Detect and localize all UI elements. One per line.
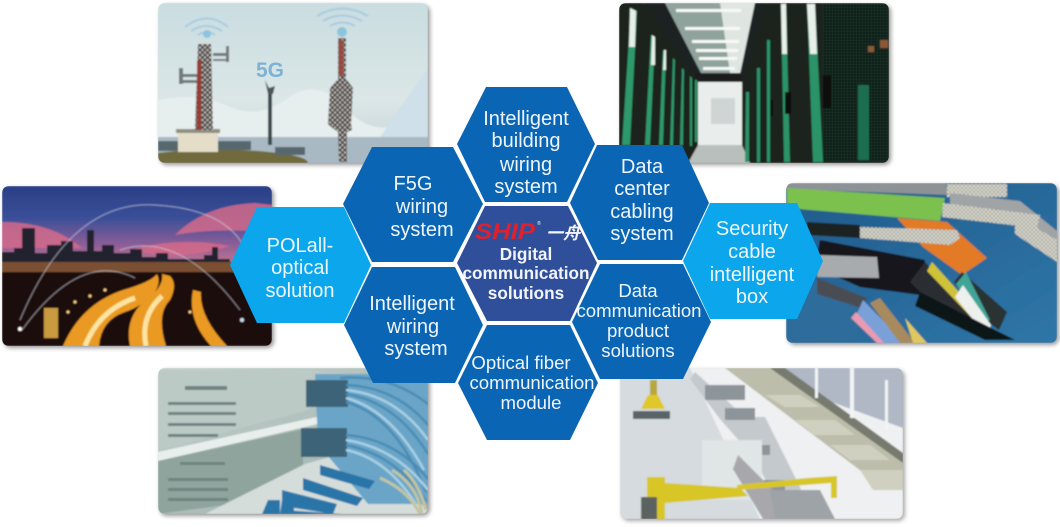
hexagon: data communication product solutions: communication xyxy=(576,300,702,321)
hexagon: security cable intelligent box: box xyxy=(736,286,768,308)
hexagon: optical fiber communication module: module xyxy=(501,392,561,413)
hexagon: data center cabling system: center xyxy=(614,178,670,200)
label: 5G: 5G xyxy=(256,59,284,82)
hexagon: POL all-optical solution: optical xyxy=(271,257,329,279)
hexagon: data communication product solutions xyxy=(572,264,711,379)
hexagon: optical fiber communication module: Optical fiber xyxy=(471,352,571,373)
hexagon: data center cabling system: system xyxy=(610,223,674,245)
hexagon: data communication product solutions: product xyxy=(607,320,670,341)
hexagon: optical fiber communication module xyxy=(458,325,598,440)
hexagon: central digital communication solutions: Digital xyxy=(500,244,552,264)
hexagon: central digital communication solutions: ® xyxy=(537,220,541,227)
photo: city skyline at night xyxy=(2,186,274,348)
photo: data center aisle xyxy=(619,3,891,165)
hexagon: intelligent wiring system: wiring xyxy=(386,316,439,338)
hexagon: security cable intelligent box: Security xyxy=(716,218,788,240)
hexagon: security cable intelligent box: intelligent xyxy=(710,264,795,286)
hexagon: intelligent building wiring system: building xyxy=(492,130,560,152)
hexagon: data center cabling system: Data xyxy=(621,156,664,178)
hexagon: POL all-optical solution: POLall- xyxy=(267,235,333,257)
hexagon: POL all-optical solution: solution xyxy=(266,280,334,302)
hexagon: intelligent wiring system xyxy=(344,267,483,383)
hexagon: data communication product solutions: Data xyxy=(618,280,658,301)
hexagon: intelligent building wiring system xyxy=(457,87,595,202)
hexagon: F5G wiring system: F5G xyxy=(394,173,432,195)
hexagon: intelligent building wiring system: system xyxy=(494,176,558,198)
hexagon: central digital communication solutions: solutions xyxy=(488,283,564,303)
hexagon: intelligent wiring system: system xyxy=(384,338,448,360)
hexagon: data communication product solutions: solutions xyxy=(601,340,675,361)
hexagon: optical fiber communication module: communication xyxy=(469,372,595,393)
photo: 5G telecom towers xyxy=(158,3,430,165)
hexagon: data center cabling system xyxy=(570,145,709,260)
hexagon: central digital communication solutions: communication xyxy=(462,263,590,283)
photo: network switches and patch cords xyxy=(158,368,430,516)
logo: Chinese brand name: 一舟 xyxy=(546,224,581,243)
hexagon: central digital communication solutions xyxy=(457,206,597,321)
hexagon: F5G wiring system: wiring xyxy=(395,196,448,218)
hexagon: data center cabling system: cabling xyxy=(610,201,674,223)
photo: factory assembly line xyxy=(620,368,905,521)
hexagon: intelligent building wiring system: wiring xyxy=(499,154,552,176)
hexagon: intelligent building wiring system: Intelligent xyxy=(483,108,569,130)
logo: SHIP: SHIP xyxy=(475,219,535,244)
hexagon: security cable intelligent box: cable xyxy=(728,241,776,263)
hexagon: security cable intelligent box xyxy=(683,203,823,319)
hexagon: POL all-optical solution xyxy=(230,207,371,323)
hexagon: intelligent wiring system: Intelligent xyxy=(369,293,455,315)
photo: shielded cables xyxy=(786,183,1059,345)
hexagon: F5G wiring system: system xyxy=(390,219,454,241)
hexagon: F5G wiring system xyxy=(343,147,483,262)
